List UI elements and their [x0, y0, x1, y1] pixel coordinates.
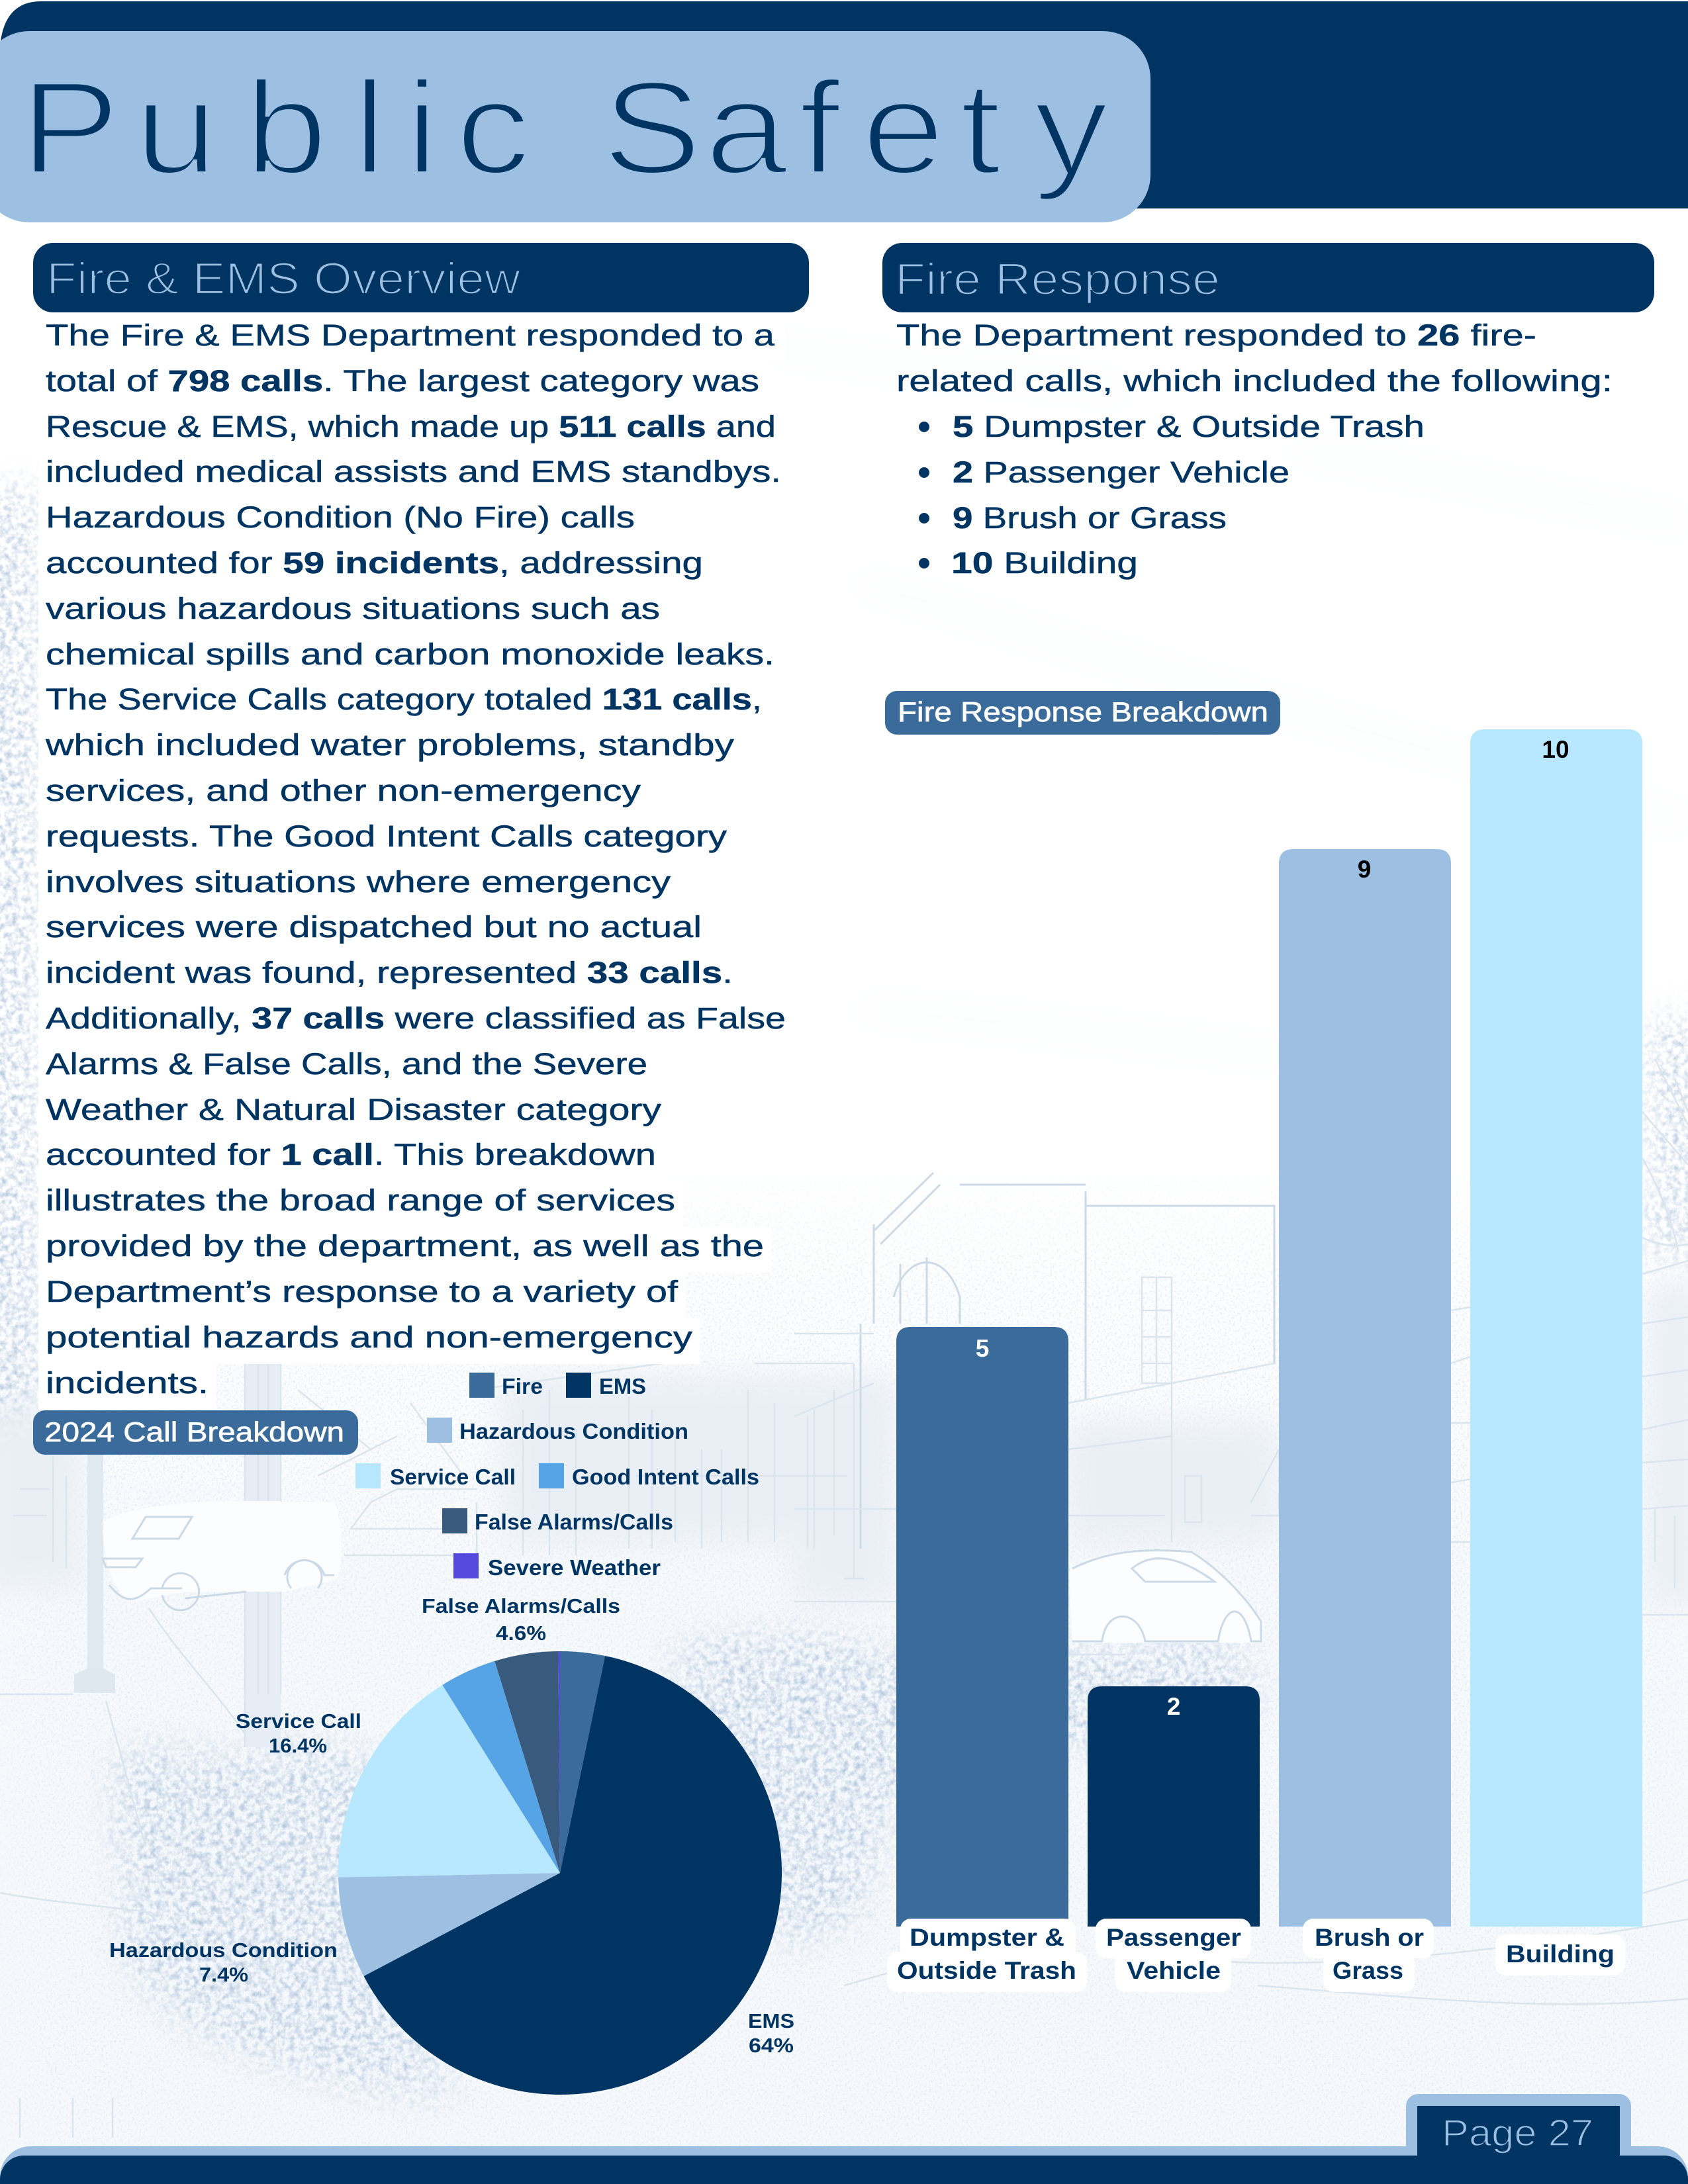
bar values: 10 — [1542, 736, 1570, 763]
text block: Fire & EMS overview paragraph: services were dispatched but no actual — [46, 910, 702, 944]
text block: Fire response intro and list: The Department responded to 26 fire- — [896, 318, 1536, 352]
text block: Fire response intro and list: 5 Dumpster & Outside Trash — [953, 410, 1425, 443]
text block: Fire & EMS overview paragraph: accounted for 59 incidents , addressing — [46, 546, 703, 580]
heading: Fire Response Breakdown: Fire Response Breakdown — [898, 696, 1268, 727]
text block: Fire & EMS overview paragraph: incident was found, represented 33 calls . — [46, 956, 733, 989]
pie label: Service Call: 16.4% — [269, 1734, 327, 1757]
axis labels — [887, 1919, 1625, 1992]
text block: Fire response intro and list: 10 Building — [951, 546, 1138, 580]
text block: Fire & EMS overview paragraph: included medical assists and EMS standbys. — [46, 455, 781, 488]
text block: Fire & EMS overview paragraph: provided by the department, as well as the — [46, 1229, 764, 1263]
pie chart legend: Severe Weather — [488, 1555, 661, 1580]
bar: Brush or Grass — [1279, 849, 1451, 1927]
axis labels: Building — [1506, 1940, 1615, 1968]
text block: Fire response intro and list: 2 Passenger Vehicle — [953, 455, 1289, 489]
pie chart: 2024 call breakdown — [338, 1651, 782, 2095]
heading: 2024 Call Breakdown — [33, 1410, 358, 1455]
text block: Fire & EMS overview paragraph: involves situations where emergency — [46, 865, 671, 899]
title: Public Safety — [21, 54, 1109, 202]
pie label: False Alarms/Calls: False Alarms/Calls — [422, 1594, 620, 1617]
pie label: False Alarms/Calls: 4.6% — [496, 1621, 546, 1645]
slice: Good Intent Calls — [442, 1661, 560, 1873]
pie chart legend: Service Call — [390, 1465, 516, 1489]
pie chart legend: EMS — [599, 1374, 646, 1398]
pie label: False Alarms/Calls — [422, 1594, 620, 1645]
panel: Fire Response heading: Fire Response — [895, 254, 1220, 304]
pie label: EMS: EMS — [748, 2009, 794, 2032]
bar values: 2 — [1167, 1693, 1180, 1720]
slice: Service Call — [338, 1685, 560, 1878]
slice: Fire — [560, 1651, 605, 1873]
slice: EMS — [364, 1656, 782, 2095]
axis labels: Dumpster & — [910, 1924, 1064, 1951]
pie label: Hazardous Condition — [109, 1938, 338, 1986]
text block: Fire & EMS overview paragraph: chemical spills and carbon monoxide leaks. — [46, 637, 774, 671]
footer band with page tab — [0, 2094, 1688, 2184]
pie chart legend: False Alarms/Calls — [475, 1510, 673, 1534]
text block: Fire & EMS overview paragraph: The Service Calls category totaled 131 calls , — [46, 682, 762, 716]
text block: Fire & EMS overview paragraph: various hazardous situations such as — [46, 592, 660, 625]
bar values: 9 — [1358, 856, 1371, 883]
bar values: 5 — [976, 1335, 989, 1362]
axis labels: Brush or — [1315, 1924, 1424, 1951]
heading: 2024 Call Breakdown: 2024 Call Breakdown — [44, 1416, 344, 1447]
pie label: Hazardous Condition: Hazardous Condition — [109, 1938, 338, 1962]
text block: Fire & EMS overview paragraph: illustrates the broad range of services — [46, 1183, 675, 1217]
axis labels: Passenger — [1106, 1924, 1241, 1951]
header band — [0, 1, 1688, 208]
text block: Fire & EMS overview paragraph: potential hazards and non-emergency — [46, 1320, 693, 1354]
panel: Fire & EMS Overview heading — [33, 243, 809, 312]
text block: Fire & EMS overview paragraph: which included water problems, standby — [45, 728, 735, 762]
text block: Fire & EMS overview paragraph: incidents. — [46, 1366, 209, 1400]
heading: Fire Response Breakdown — [885, 691, 1280, 735]
slice: False Alarms/Calls — [494, 1651, 560, 1873]
bar values — [976, 736, 1570, 1720]
title panel — [0, 31, 1150, 222]
pie chart legend: Fire — [502, 1374, 543, 1398]
text block: Fire & EMS overview paragraph: total of 798 calls . The largest category was — [46, 364, 759, 398]
panel: Fire Response heading — [882, 243, 1654, 312]
text block: Fire & EMS overview paragraph: accounted for 1 call . This breakdown — [46, 1138, 656, 1171]
pie chart legend — [355, 1373, 759, 1580]
pie label: Service Call — [236, 1709, 361, 1757]
pie label: EMS — [748, 2009, 794, 2057]
text block: Fire & EMS overview paragraph: Alarms & False Calls, and the Severe — [46, 1047, 647, 1081]
pie label: EMS: 64% — [749, 2034, 794, 2057]
page number: Page 27 — [1442, 2112, 1593, 2154]
text block: Fire & EMS overview paragraph: services, and other non-emergency — [46, 774, 641, 807]
text block: Fire response intro and list — [896, 318, 1613, 580]
text block: Fire & EMS overview paragraph: Hazardous Condition (No Fire) calls — [46, 500, 635, 534]
text block: Fire & EMS overview paragraph — [38, 314, 794, 1410]
text block: Fire response intro and list: 9 Brush or Grass — [953, 501, 1227, 535]
text block: Fire & EMS overview paragraph: Additionally, 37 calls were classified as False — [46, 1001, 786, 1035]
panel: Fire & EMS Overview heading: Fire & EMS Overview — [46, 253, 521, 304]
pie label: Service Call: Service Call — [236, 1709, 361, 1733]
axis labels: Grass — [1333, 1957, 1403, 1984]
text block: Fire response intro and list: related calls, which included the following: — [896, 364, 1613, 398]
pie chart legend: Hazardous Condition — [459, 1419, 688, 1443]
text block: Fire & EMS overview paragraph: Weather & Natural Disaster category — [46, 1093, 662, 1126]
slice: Severe Weather — [558, 1651, 560, 1873]
pie label: Hazardous Condition: 7.4% — [199, 1963, 248, 1986]
text block: Fire & EMS overview paragraph: Department’s response to a variety of — [46, 1275, 679, 1308]
text block: Fire & EMS overview paragraph: requests. The Good Intent Calls category — [46, 819, 727, 853]
pie chart legend: Good Intent Calls — [572, 1465, 759, 1489]
bar: Building — [1470, 729, 1642, 1927]
bar: Dumpster & Outside Trash — [896, 1327, 1068, 1927]
slice: Hazardous Condition — [338, 1873, 560, 1976]
text block: Fire & EMS overview paragraph: Rescue & EMS, which made up 511 calls and — [46, 410, 776, 443]
bar: Passenger Vehicle — [1088, 1686, 1260, 1927]
bar chart: Fire Response Breakdown — [887, 729, 1642, 1992]
text block: Fire & EMS overview paragraph: The Fire & EMS Department responded to a — [46, 318, 775, 352]
axis labels: Outside Trash — [897, 1957, 1076, 1984]
axis labels: Vehicle — [1127, 1957, 1221, 1984]
